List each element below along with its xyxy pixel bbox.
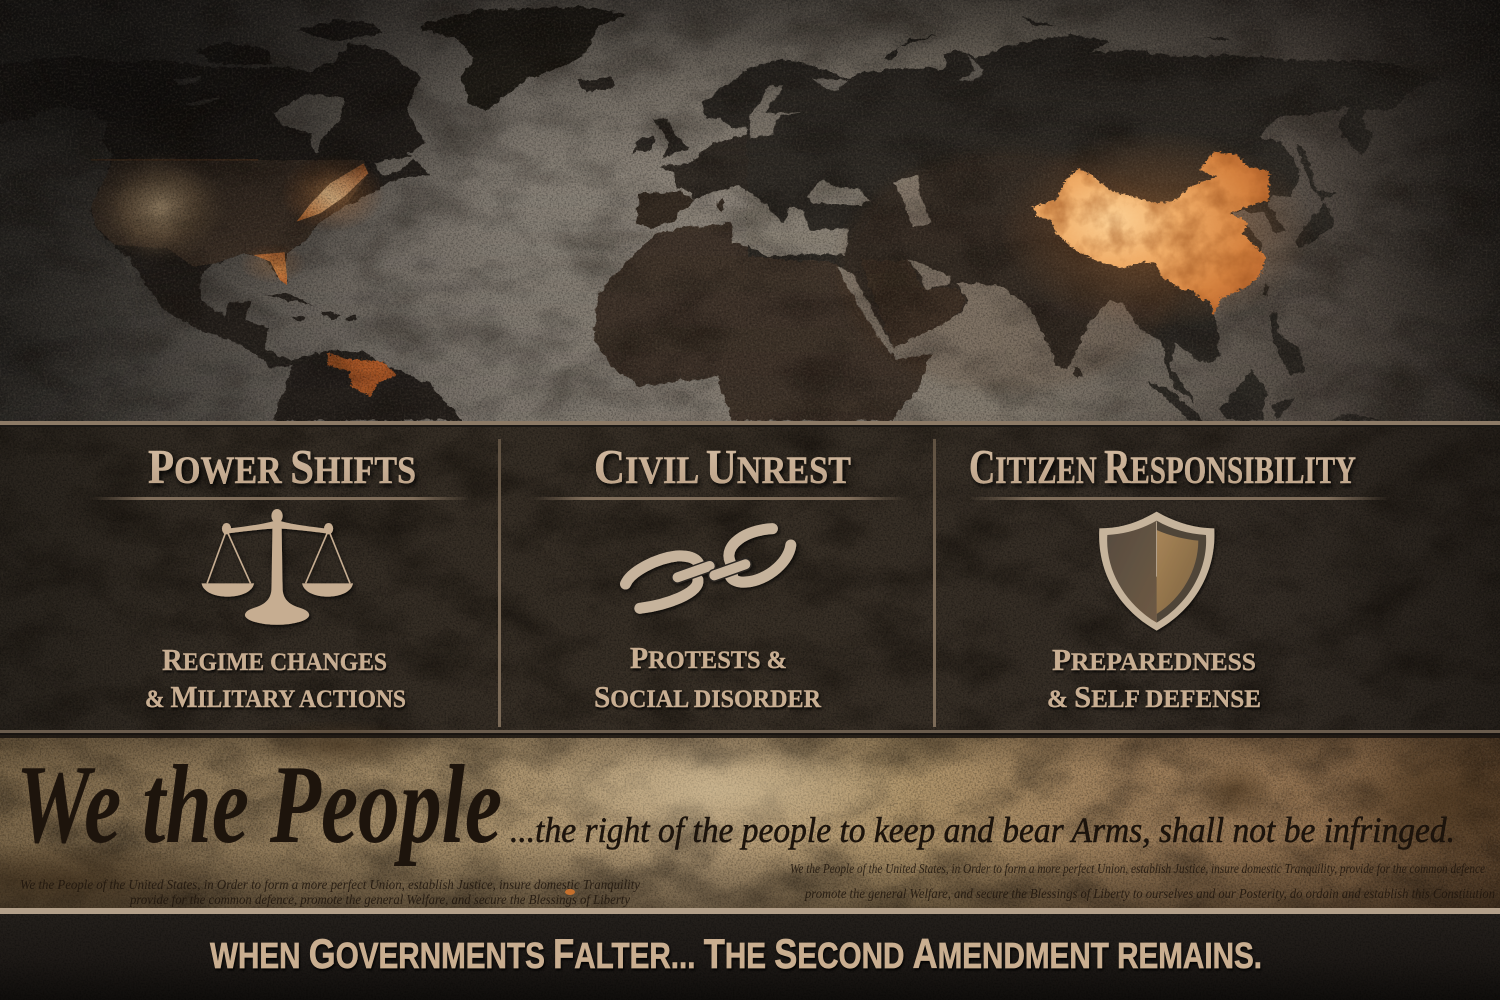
- landmass: Eurasia and east Africa: [747, 17, 1441, 421]
- heading: Civil Unrest: CIVIL UNREST: [594, 439, 851, 494]
- fine script lines, left: [20, 878, 641, 908]
- continents: [0, 7, 1441, 421]
- US Canada border line: [91, 159, 258, 161]
- text: Protests and Social disorder: [594, 640, 822, 714]
- fine script lines, left: provide for the common defence, promote the general Welfare, and secure the Blessings of Liberty: [129, 893, 631, 908]
- lit lands: [0, 0, 1500, 510]
- footer background: [0, 914, 1500, 1000]
- icon: broken chain: [626, 529, 791, 608]
- Baltic Sea: [750, 85, 803, 138]
- Hudson Bay: [273, 93, 344, 153]
- panel band: [0, 421, 1500, 734]
- text: Regime changes and Military actions: REGIME CHANGES: [162, 642, 387, 677]
- footer band: [0, 914, 1500, 1000]
- icon: shield: [1099, 512, 1214, 631]
- panel: Civil Unrest: [530, 439, 905, 714]
- ocean: [0, 0, 1500, 423]
- China highlight: [999, 130, 1314, 330]
- heading: Citizen Responsibility: CITIZEN RESPONSIBILITY: [969, 439, 1356, 494]
- heading: Power Shifts: POWER SHIFTS: [148, 439, 416, 494]
- Black Sea: [807, 180, 870, 205]
- landmass: Europe and west Africa: [593, 68, 752, 421]
- Caspian Sea: [893, 175, 932, 227]
- White Sea: [812, 78, 848, 92]
- panel: Power Shifts: [90, 439, 470, 714]
- Gulf of St Lawrence: [373, 155, 416, 177]
- parchment background: [0, 735, 1500, 915]
- world map: [0, 0, 1500, 510]
- United States east coast glow: [239, 155, 397, 397]
- Venezuela highlight: [328, 353, 397, 397]
- fine script lines, left: We the People of the United States, in Order to form a more perfect Union, establish Justice, insure domestic Tranquility: [20, 878, 641, 893]
- Florida highlight: [239, 243, 306, 283]
- text: Regime changes and Military actions: & MILITARY ACTIONS: [145, 679, 406, 714]
- Great Lakes: [258, 165, 306, 200]
- text: Preparedness and Self defense: & SELF DEFENSE: [1047, 679, 1261, 714]
- map texture and vignette: [0, 0, 1500, 510]
- panel background: [0, 424, 1500, 734]
- script: Second Amendment quote: ...the right of the people to keep and bear Arms, shall not be infringed.: [510, 810, 1455, 850]
- Gulf of Aden: [891, 333, 946, 360]
- text: Protests and Social disorder: SOCIAL DISORDER: [594, 679, 822, 714]
- landmass: Americas: [0, 7, 689, 421]
- ember spot: [565, 889, 575, 895]
- parchment banner: [0, 719, 1500, 920]
- fine script lines, right: [790, 862, 1495, 902]
- Red Sea: [836, 267, 893, 355]
- Eurasia warm tint: [840, 150, 1180, 390]
- Mediterranean: [746, 190, 848, 257]
- footer tagline: WHEN GOVERNMENTS FALTER... THE SECOND AMENDMENT REMAINS.: [210, 930, 1262, 977]
- panel: Citizen Responsibility: [968, 439, 1390, 714]
- text: Preparedness and Self defense: PREPAREDNESS: [1052, 642, 1256, 677]
- text: Preparedness and Self defense: [1047, 642, 1261, 714]
- seas and lakes: [122, 55, 984, 360]
- Persian Gulf: [908, 260, 951, 290]
- icon: scales of justice: [202, 509, 353, 625]
- United States lit terrain: [91, 150, 368, 267]
- script: We the People: We the People: [16, 743, 502, 867]
- text: Regime changes and Military actions: [145, 642, 406, 714]
- text: Protests and Social disorder: PROTESTS &: [630, 640, 787, 675]
